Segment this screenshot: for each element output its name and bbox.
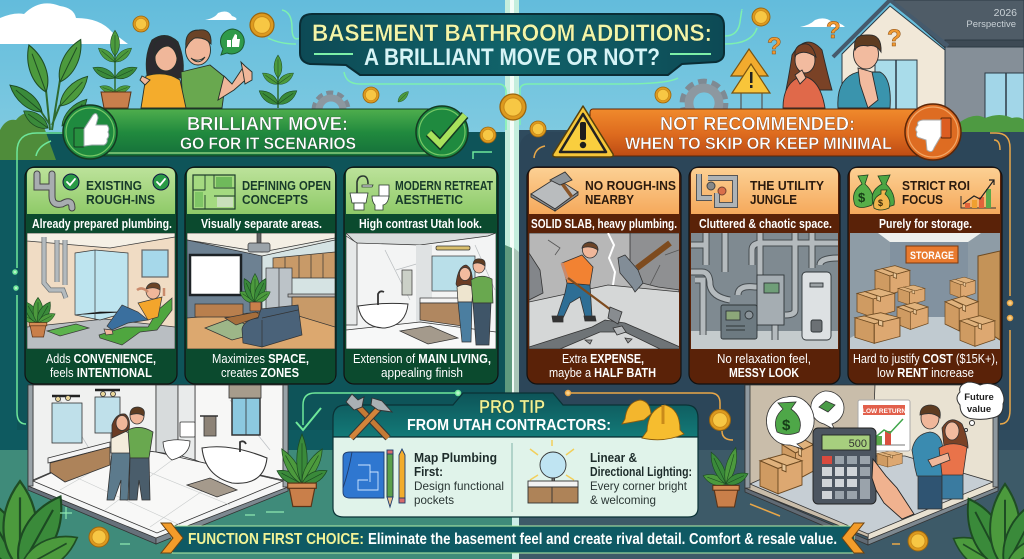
scene: pipes and water heater	[691, 233, 838, 349]
card: modern retreat aesthetic: MODERN RETREAT	[395, 178, 493, 193]
card: modern retreat aesthetic: AESTHETIC	[395, 192, 464, 207]
card: defining open concepts: CONCEPTS	[242, 192, 308, 207]
left top plants and coins	[6, 13, 526, 143]
scene: marble bathroom	[346, 233, 496, 349]
icon: crossed tools	[346, 394, 392, 438]
card: modern retreat aesthetic	[344, 167, 498, 384]
header: not recommended: NOT RECOMMENDED:	[660, 114, 855, 134]
bottom corner foliage	[0, 481, 1024, 559]
icon: thumbs up	[63, 105, 117, 159]
right room couple	[912, 405, 968, 509]
year note	[966, 7, 1017, 30]
card: strict roi focus: Hard to justify COST ($15K+),	[853, 352, 998, 366]
icon: money bags: $	[858, 190, 866, 205]
card: no rough-ins nearby: Extra EXPENSE,	[562, 352, 644, 366]
card: strict roi focus: low RENT increase	[877, 366, 974, 380]
future value thought bubble	[957, 382, 1004, 432]
house	[833, 0, 1024, 130]
card: the utility jungle: No relaxation feel,	[717, 352, 811, 366]
scene: breaking concrete	[529, 233, 680, 349]
neon arrow: pro tip to room	[296, 390, 460, 430]
icon: tangled pipes	[699, 174, 735, 205]
card: no rough-ins nearby	[527, 167, 681, 384]
header: not recommended: WHEN TO SKIP OR KEEP MINIMAL	[625, 134, 892, 153]
card: defining open concepts: creates ZONES	[221, 366, 299, 380]
icon: left chevron	[161, 523, 183, 553]
header: brilliant move: GO FOR IT SCENARIOS	[180, 134, 356, 153]
panel outline: right	[534, 133, 1012, 424]
card: defining open concepts: Maximizes SPACE,	[212, 352, 309, 366]
icon: check mark	[416, 106, 468, 158]
question marks: ?	[887, 25, 902, 52]
card: existing rough-ins	[19, 167, 177, 384]
title: A BRILLIANT MOVE OR NOT?	[364, 44, 660, 71]
card: strict roi focus: Purely for storage.	[879, 217, 972, 231]
pro tip panel: First:	[414, 465, 443, 479]
card: strict roi focus: STRICT ROI	[902, 178, 970, 193]
year note: Perspective	[966, 19, 1016, 30]
icon: slab and hammer	[531, 172, 578, 211]
center-right potted plant	[702, 446, 750, 507]
bottom-left room illustration	[28, 385, 288, 544]
card: the utility jungle: JUNGLE	[750, 192, 797, 207]
question marks: ?	[826, 17, 841, 44]
pro tip panel: PRO TIP	[479, 397, 545, 417]
pro tip panel: pockets	[414, 493, 454, 507]
card: strict roi focus	[848, 167, 1002, 384]
question marks	[767, 17, 902, 60]
card: no rough-ins nearby: NEARBY	[585, 192, 634, 207]
card: no rough-ins nearby: SOLID SLAB, heavy plumbing.	[531, 217, 677, 231]
card: existing rough-ins: Already prepared plumbing.	[32, 217, 172, 231]
title: BASEMENT BATHROOM ADDITIONS:	[312, 20, 712, 47]
bushes	[0, 113, 1024, 160]
icon: money bags: $	[878, 198, 883, 208]
storage sign	[906, 246, 958, 263]
function first banner	[161, 523, 864, 553]
icon: growth chart	[961, 180, 996, 208]
card: no rough-ins nearby: maybe a HALF BATH	[549, 366, 656, 380]
panel outline: left	[13, 133, 492, 424]
card: the utility jungle: THE UTILITY	[750, 178, 824, 193]
center-left potted plant	[275, 434, 329, 506]
neon arrow: coin link	[566, 390, 733, 440]
low return chart card	[858, 400, 910, 451]
pro tip panel: Directional Lighting:	[590, 465, 692, 479]
pro tip panel: & welcoming	[590, 493, 656, 507]
storage sign: STORAGE	[910, 250, 954, 262]
card: defining open concepts: DEFINING OPEN	[242, 178, 331, 193]
pro tip panel: Map Plumbing	[414, 451, 497, 465]
card: modern retreat aesthetic: Extension of MAIN LIVING,	[353, 352, 491, 366]
card: existing rough-ins: ROUGH-INS	[86, 192, 155, 207]
icon: thumbs down	[905, 104, 961, 160]
future value thought bubble: Future	[964, 392, 994, 403]
header: brilliant move	[63, 105, 468, 159]
scene: storage boxes	[850, 233, 1000, 349]
pro tip panel: Linear &	[590, 451, 637, 465]
card: the utility jungle: MESSY LOOK	[729, 366, 799, 380]
icon: hard hats	[622, 400, 684, 440]
icon: lit mirror vanity	[528, 440, 578, 503]
right top coins and gear	[530, 8, 770, 137]
card: no rough-ins nearby: NO ROUGH-INS	[585, 178, 676, 193]
thumbs-up speech bubble	[220, 29, 244, 55]
icon: warning triangle	[553, 106, 613, 157]
thought bubble with money bag	[766, 391, 844, 449]
pro tip panel: FROM UTAH CONTRACTORS:	[407, 417, 611, 434]
right couple illustration	[783, 35, 890, 108]
icon: shower and toilet	[350, 176, 389, 210]
scene: bathroom with lounge	[19, 233, 175, 349]
pro tip panel: Every corner bright	[590, 479, 688, 493]
calculator with hand	[813, 428, 914, 519]
neon connectors	[268, 10, 757, 130]
title	[300, 14, 724, 75]
card: existing rough-ins: EXISTING	[86, 178, 142, 193]
card: defining open concepts	[185, 167, 336, 384]
thought bubble with money bag: $	[782, 417, 791, 434]
low return chart card: LOW RETURN	[862, 408, 906, 415]
header: brilliant move: BRILLIANT MOVE:	[187, 114, 348, 134]
function first banner: FUNCTION FIRST CHOICE:	[188, 531, 364, 548]
year note: 2026	[994, 7, 1017, 19]
warning signs	[731, 49, 770, 110]
clouds	[0, 3, 845, 44]
icon: money bags	[854, 175, 894, 210]
function first banner: Eliminate the basement feel and create rival detail. Comfort & resale value.	[368, 531, 837, 548]
icon: floor plan	[193, 175, 235, 209]
card: strict roi focus: FOCUS	[902, 192, 943, 207]
card: modern retreat aesthetic: High contrast Utah look.	[359, 217, 482, 231]
left couple illustration	[140, 30, 252, 108]
bottom-right room illustration	[745, 385, 998, 545]
scene: open living space	[187, 233, 335, 349]
card: existing rough-ins: Adds CONVENIENCE,	[46, 352, 156, 366]
card: the utility jungle	[689, 167, 840, 384]
card: existing rough-ins: feels INTENTIONAL	[50, 366, 152, 380]
future value thought bubble: value	[967, 404, 991, 415]
card: defining open concepts: Visually separate areas.	[201, 217, 322, 231]
icon: pipes	[37, 174, 169, 208]
pro tip panel	[333, 393, 698, 517]
pro tip panel: Design functional	[414, 479, 504, 493]
icon: right chevron	[842, 523, 864, 553]
calculator with hand: 500	[849, 438, 867, 450]
card: the utility jungle: Cluttered & chaotic space.	[699, 217, 832, 231]
question marks: ?	[767, 33, 782, 60]
header: not recommended	[553, 104, 961, 160]
card: modern retreat aesthetic: appealing finish	[381, 366, 463, 380]
icon: blueprint and pencils	[343, 449, 405, 507]
